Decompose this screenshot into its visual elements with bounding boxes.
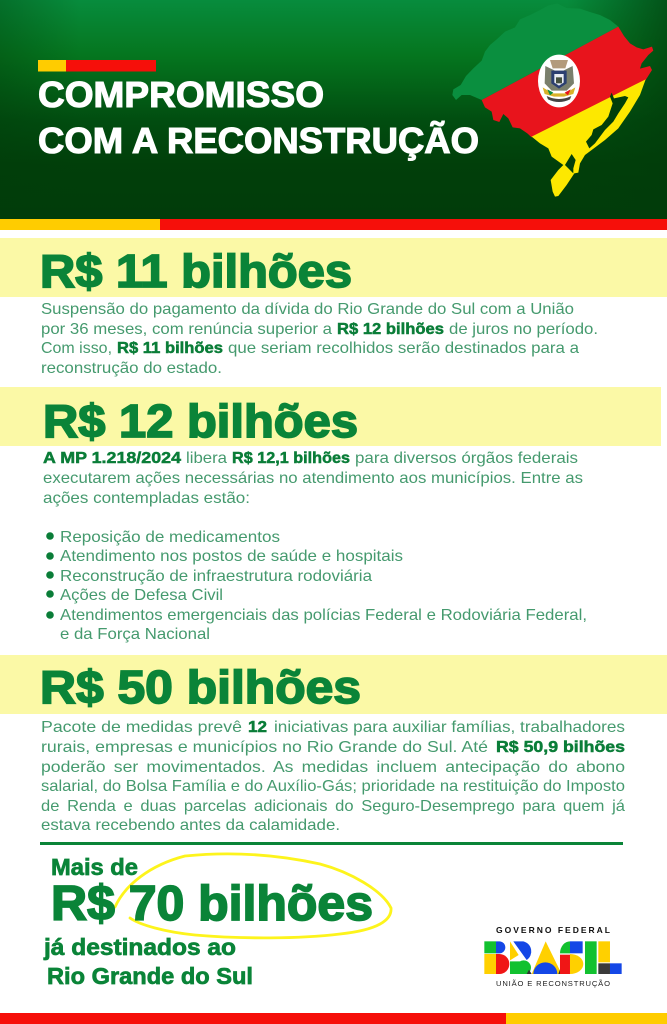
panel: R$ 11 bilhões [0, 238, 667, 377]
heading: R$ 11 bilhões [40, 245, 352, 297]
text block: A MP 1.218/2024 [43, 450, 181, 467]
text block: Pacote de medidas prevê [41, 719, 242, 736]
top stripe [0, 219, 667, 230]
coat of arms [538, 55, 580, 107]
bottom stripe [0, 1013, 667, 1024]
callout: total R$ 70 bilhões: já destinados ao [43, 934, 236, 960]
text block: Suspensão do pagamento da dívida do Rio Grande do Sul com a União [41, 301, 574, 318]
title: COM A RECONSTRUÇÃO [38, 119, 479, 161]
title accent bar [38, 60, 156, 72]
panel: R$ 12 bilhões [0, 387, 661, 643]
title: COMPROMISSO [38, 74, 324, 115]
bullet list: Reposição de medicamentos [60, 529, 280, 546]
bullet list: Ações de Defesa Civil [60, 587, 223, 604]
text block: estava recebendo antes da calamidade. [41, 817, 340, 834]
text block: iniciativas para auxiliar famílias, trabalhadores [274, 719, 625, 736]
panel: R$ 50 bilhões [0, 655, 667, 834]
icon: Rio Grande do Sul flag map [452, 3, 653, 197]
text block: reconstrução do estado. [41, 360, 222, 377]
bullet list: e da Força Nacional [60, 626, 210, 643]
text block: de juros no período. [449, 321, 598, 338]
header panel [0, 0, 667, 219]
text block: R$ 11 bilhões [117, 340, 223, 357]
callout: total R$ 70 bilhões: Mais de [51, 854, 138, 880]
text block: ações contempladas estão: [43, 490, 250, 507]
text block: para diversos órgãos federais [355, 450, 578, 467]
bullet list: Reconstrução de infraestrutura rodoviária [60, 568, 372, 585]
title [38, 74, 479, 161]
text block: R$ 50,9 bilhões [496, 739, 625, 756]
text block: rurais, empresas e municípios no Rio Grande do Sul. Até [41, 739, 488, 756]
text block: 12 [248, 719, 267, 736]
text block: poderão ser movimentados. As medidas incluem antecipação do abono [41, 759, 625, 776]
yellow hand-drawn ellipse [115, 854, 391, 938]
callout: total R$ 70 bilhões: R$ 70 bilhões [51, 877, 373, 931]
bullet list: Atendimentos emergenciais das polícias Federal e Rodoviária Federal, [60, 607, 587, 624]
text block: executarem ações necessárias no atendimento aos municípios. Entre as [43, 470, 583, 487]
heading: R$ 12 bilhões [43, 395, 358, 447]
text block: R$ 12 bilhões [337, 321, 444, 338]
text block: de Renda e duas parcelas adicionais do Seguro-Desemprego para quem já [41, 798, 625, 815]
logo: Governo Federal Brasil: UNIÃO E RECONSTRUÇÃO [496, 979, 610, 988]
logo: Governo Federal Brasil [484, 925, 622, 988]
callout: total R$ 70 bilhões [43, 854, 391, 989]
logo: Governo Federal Brasil: GOVERNO FEDERAL [496, 925, 610, 935]
text block: por 36 meses, com renúncia superior a [41, 321, 332, 338]
text block [43, 450, 583, 507]
text block [41, 301, 598, 377]
bullet list [46, 529, 587, 643]
callout: total R$ 70 bilhões: Rio Grande do Sul [47, 963, 253, 989]
text block [41, 719, 625, 834]
bullet list: Atendimento nos postos de saúde e hospitais [60, 548, 403, 565]
text block: que seriam recolhidos serão destinados para a [228, 340, 579, 357]
text block: libera [186, 450, 227, 467]
text block: Com isso, [41, 340, 112, 357]
text block: salarial, do Bolsa Família e do Auxílio-Gás; prioridade na restituição do Imposto [41, 778, 625, 795]
heading: R$ 50 bilhões [40, 661, 361, 713]
lagoon [586, 93, 628, 148]
text block: R$ 12,1 bilhões [232, 450, 350, 467]
